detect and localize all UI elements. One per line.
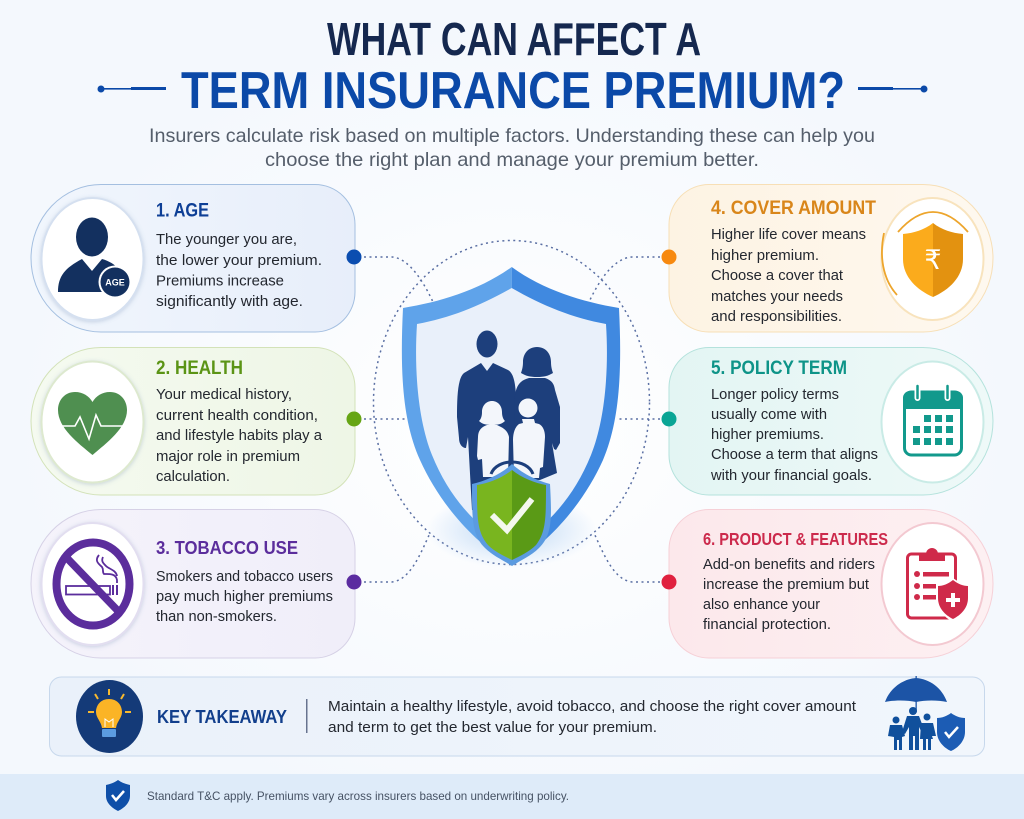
text: policy term: with your financial goals. [710, 468, 872, 484]
text: health [156, 387, 323, 485]
text: health: current health condition, [156, 408, 318, 424]
icon: calendar [882, 362, 984, 482]
text: age: Premiums increase [156, 274, 284, 290]
text: policy term: Choose a term that aligns [711, 447, 878, 463]
panel: product and features [669, 510, 993, 658]
text: product and features: increase the premium but [703, 577, 869, 593]
title ornaments [98, 86, 928, 92]
heading: age: 1. AGE [156, 200, 209, 222]
text: cover amount: Choose a cover that [711, 268, 843, 284]
icon: clipboard with shield [882, 523, 984, 645]
text: cover amount: and responsibilities. [711, 309, 842, 325]
panel: health [31, 348, 355, 495]
title [181, 13, 845, 120]
panel: age [31, 184, 355, 332]
text: age: The younger you are, [156, 232, 297, 248]
panel: tobacco use [31, 510, 355, 658]
text: age [156, 232, 322, 310]
icon: light bulb [76, 680, 143, 753]
text: product and features: also enhance your [703, 597, 820, 613]
heading: cover amount: 4. COVER AMOUNT [711, 198, 876, 219]
text: product and features: financial protection. [703, 617, 831, 633]
icon: rupee shield [882, 198, 984, 320]
subtitle [149, 125, 875, 171]
text: age: the lower your premium. [156, 253, 322, 269]
icon: person with age badge [42, 198, 144, 320]
text: key takeaway: and term to get the best value for your premium. [328, 720, 657, 736]
panel: key takeaway [50, 676, 984, 756]
icon: rupee shield: ₹ [924, 245, 942, 276]
title line two: TERM INSURANCE PREMIUM? [181, 62, 845, 120]
icon: footer shield [106, 780, 130, 811]
woman [514, 347, 560, 480]
text: tobacco use [156, 569, 333, 625]
footer [0, 774, 1024, 819]
text: policy term: usually come with [711, 407, 827, 423]
text: key takeaway: Maintain a healthy lifestyle, avoid tobacco, and choose the right cover amount [328, 699, 856, 715]
text: age: significantly with age. [156, 294, 303, 310]
subtitle: Insurers calculate risk based on multiple factors. Understanding these can help you [149, 125, 875, 147]
text: cover amount: Higher life cover means [711, 227, 866, 243]
connectors [364, 240, 660, 582]
text: cover amount: higher premium. [711, 248, 819, 264]
text: product and features [703, 557, 875, 633]
text: tobacco use: pay much higher premiums [156, 589, 333, 605]
heading: key takeaway: KEY TAKEAWAY [157, 706, 288, 727]
text: policy term: higher premiums. [711, 427, 824, 443]
text: health: and lifestyle habits play a [156, 428, 323, 444]
man [457, 330, 516, 512]
icon: no smoking [42, 523, 144, 645]
panel: cover amount [669, 184, 993, 332]
text: product and features: Add-on benefits and riders [703, 557, 875, 573]
icon: umbrella, family and shield [885, 676, 965, 751]
text: cover amount: matches your needs [711, 289, 843, 305]
title line one: WHAT CAN AFFECT A [327, 13, 701, 65]
icon: heart with pulse [42, 362, 144, 482]
text: policy term: Longer policy terms [711, 387, 839, 403]
heading: policy term: 5. POLICY TERM [711, 358, 847, 379]
icon: green check shield [472, 462, 551, 566]
text: health: major role in premium [156, 449, 300, 465]
panel: policy term [669, 348, 993, 495]
central shield with family [402, 267, 620, 568]
text: tobacco use: than non-smokers. [156, 609, 277, 625]
footer note: Standard T&C apply. Premiums vary across insurers based on underwriting policy. [147, 789, 569, 803]
text: policy term [710, 387, 878, 484]
children [477, 398, 545, 478]
heading: tobacco use: 3. TOBACCO USE [156, 537, 298, 558]
text: tobacco use: Smokers and tobacco users [156, 569, 333, 585]
text: health: Your medical history, [156, 387, 292, 403]
subtitle: choose the right plan and manage your premium better. [265, 149, 759, 171]
connector dots [346, 250, 676, 590]
text: health: calculation. [156, 469, 230, 485]
family silhouette [457, 330, 560, 512]
shield band [402, 267, 620, 565]
text: cover amount [711, 227, 866, 325]
heading: product and features: 6. PRODUCT & FEATURES [703, 529, 888, 549]
shield interior [416, 288, 607, 548]
heading: health: 2. HEALTH [156, 358, 243, 379]
text: key takeaway [328, 699, 856, 736]
icon: person with age badge: AGE [105, 278, 125, 288]
